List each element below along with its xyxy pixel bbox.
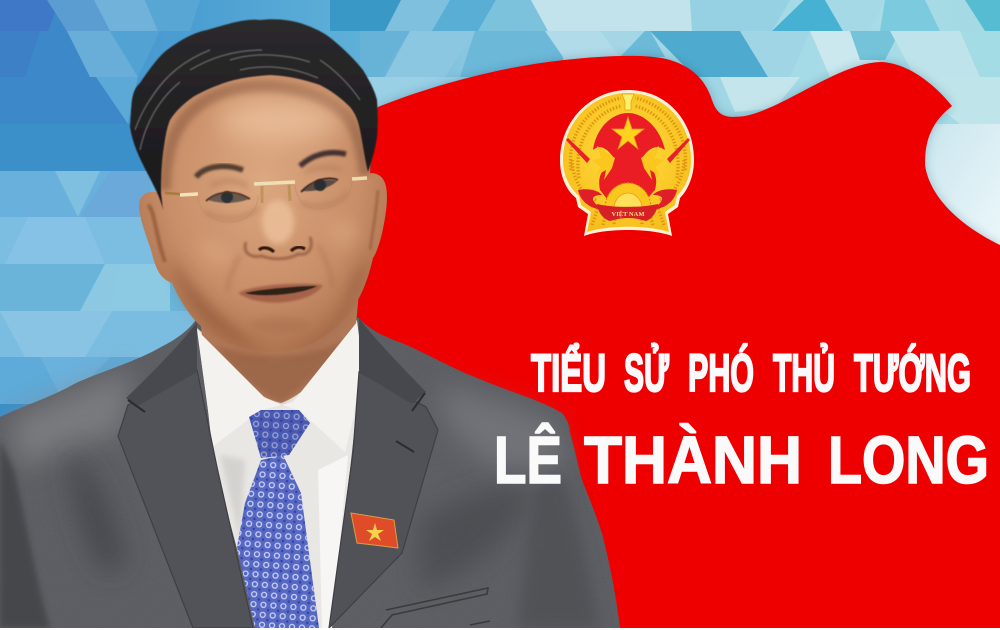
- suit jacket: [0, 318, 620, 628]
- emblem gold branches: [592, 146, 664, 180]
- forehead highlight: [218, 98, 342, 142]
- name: Lê Thành Long: [494, 423, 989, 498]
- shirt: [197, 320, 362, 628]
- neck: [200, 280, 360, 403]
- emblem red ribbon with text: VIỆT NAM: [612, 210, 644, 218]
- emblem red dome: [593, 113, 665, 202]
- right lapel: [329, 372, 438, 628]
- emblem red bars: [566, 138, 690, 163]
- necktie: [237, 410, 319, 628]
- face and ears: [139, 55, 387, 352]
- suit light shading: [10, 368, 130, 470]
- red flag: [330, 56, 1000, 628]
- hairline shadow on forehead: [165, 87, 365, 190]
- name: Lê Thành Long: LÊ: [494, 423, 562, 498]
- left lapel: [118, 370, 253, 628]
- left eye: [206, 191, 250, 203]
- emblem red ribbon with text: [578, 189, 677, 221]
- emblem gear: [605, 183, 651, 207]
- bottom white edge: [0, 628, 1000, 630]
- emblem white outline: [560, 90, 694, 236]
- headline: biography of the deputy prime minister: PHÓ: [688, 343, 754, 403]
- shirt collar: [197, 322, 361, 452]
- rimless glasses: [165, 178, 367, 222]
- headline: biography of the deputy prime minister: SỬ: [624, 343, 669, 403]
- face side shading: [170, 250, 370, 352]
- emblem gold star: [612, 117, 644, 149]
- headline: biography of the deputy prime minister: [531, 343, 971, 403]
- right eye: [301, 178, 338, 192]
- suit dark shading: [70, 450, 125, 573]
- eyelid and eye bag shading: [205, 167, 348, 218]
- nose: [245, 200, 311, 259]
- left eyebrow: [196, 166, 243, 177]
- flag shadow: [360, 56, 1000, 628]
- emblem wheat texture: [570, 98, 686, 225]
- portrait of the man: [0, 19, 620, 628]
- right ear shadow: [370, 190, 378, 250]
- emblem of Vietnam: [560, 90, 694, 236]
- right upper collar: [359, 318, 426, 404]
- chin shading: [250, 317, 310, 333]
- headline: biography of the deputy prime minister: TIỂU: [531, 343, 606, 403]
- headline: biography of the deputy prime minister: THỦ: [773, 343, 835, 403]
- hair: [130, 19, 378, 210]
- hair grey streaks: [135, 50, 360, 150]
- buttonhole marks: [128, 393, 425, 452]
- red flag lapel pin: [351, 513, 398, 548]
- left ear shadow: [148, 205, 165, 262]
- right eyebrow: [300, 153, 346, 166]
- name: Lê Thành Long: THÀNH: [584, 423, 802, 498]
- emblem gold wreath: [563, 93, 691, 232]
- breast pocket: [381, 588, 490, 628]
- emblem top ornament: [622, 94, 634, 110]
- mouth: [238, 284, 323, 303]
- nasolabial folds: [228, 245, 332, 292]
- left upper collar: [126, 322, 197, 407]
- cheek highlights: [195, 219, 358, 267]
